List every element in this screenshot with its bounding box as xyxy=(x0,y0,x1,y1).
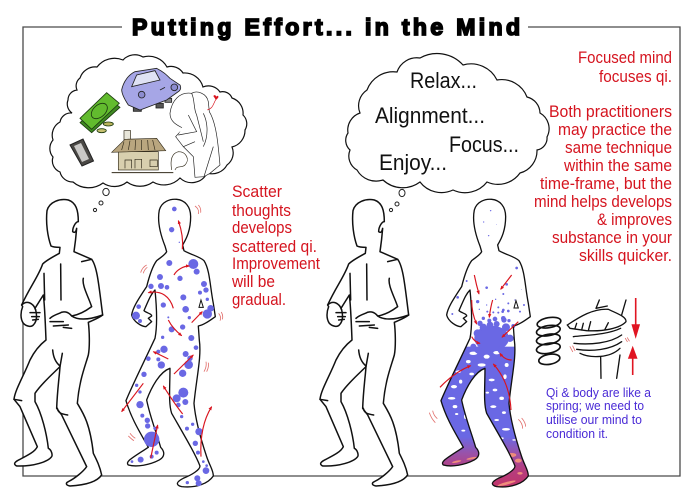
text: focused mind caption: mind helps develops xyxy=(534,193,672,211)
title: Putting Effort... in the Mind xyxy=(132,14,520,40)
text: scatter thoughts caption: develops xyxy=(232,219,292,237)
text: scatter thoughts caption: Improvement xyxy=(232,255,320,273)
thought cloud: material desires xyxy=(50,55,247,212)
chest mark xyxy=(199,300,203,307)
figure 1: plain body, scattered mind xyxy=(14,200,103,486)
text: focused mind caption: substance in your xyxy=(552,229,672,247)
motion marks xyxy=(128,205,223,441)
icon: house xyxy=(112,131,187,173)
text: scatter thoughts caption: thoughts xyxy=(232,202,291,220)
focused qi cluster at dantian xyxy=(451,210,525,356)
text: focused mind caption xyxy=(534,49,672,265)
text: focused mind caption: skills quicker. xyxy=(579,247,672,265)
text: focused mind caption: focuses qi. xyxy=(599,68,672,86)
text: spring caption: condition it. xyxy=(546,427,608,441)
motion marks xyxy=(570,338,629,352)
spring arrow down xyxy=(632,298,639,336)
motion marks xyxy=(429,411,526,429)
text: focused mind caption: may practice the xyxy=(558,121,672,139)
body outline xyxy=(441,199,530,487)
icon: coil spring xyxy=(536,316,562,366)
text: scatter thoughts caption: scattered qi. xyxy=(232,238,317,256)
text: focused mind caption: Focused mind xyxy=(578,49,672,67)
thought cloud: focus words xyxy=(346,54,549,212)
figure 2: scattered qi body xyxy=(122,199,223,487)
icon: money xyxy=(80,93,120,133)
text: focused mind caption: Both practitioners xyxy=(549,103,672,121)
spring and hand illustration xyxy=(536,300,629,378)
figure 3: plain body, focused mind xyxy=(320,200,409,486)
figure 4: focused qi body xyxy=(429,199,537,490)
text: spring caption: Qi & body are like a xyxy=(546,386,651,400)
word: Relax: Relax... xyxy=(410,68,477,93)
icon: hand pressing coiled arm xyxy=(567,300,626,378)
icon: phone xyxy=(70,139,94,166)
spring arrow up xyxy=(629,348,636,375)
word: Enjoy: Enjoy... xyxy=(379,150,447,175)
text: focused mind caption: within the same xyxy=(563,157,672,175)
text: scatter thoughts caption: Scatter xyxy=(232,183,282,201)
text: spring caption: utilise our mind to xyxy=(546,413,642,427)
inward qi arrows xyxy=(440,275,518,410)
word: Alignment: Alignment... xyxy=(375,103,485,128)
text: scatter thoughts caption xyxy=(231,183,320,309)
word: Focus: Focus... xyxy=(449,132,519,157)
qi dots scattered xyxy=(131,207,214,486)
icon: couple xyxy=(170,92,220,177)
warm patches on the feet xyxy=(452,453,523,487)
icon: car xyxy=(122,68,181,111)
thought bubbles right xyxy=(389,189,405,212)
thought bubbles left xyxy=(93,188,109,212)
text: focused mind caption: & improves xyxy=(597,211,672,229)
text: focused mind caption: time-frame, but the xyxy=(540,175,672,193)
text: spring caption: spring; we need to xyxy=(546,399,644,413)
qi flow arrows xyxy=(122,221,212,458)
text: spring caption xyxy=(546,386,651,441)
qi fill in legs and feet xyxy=(442,346,528,486)
white gaps between qi xyxy=(448,351,516,441)
text: scatter thoughts caption: will be xyxy=(231,273,275,291)
text: focused mind caption: same technique xyxy=(565,139,672,157)
text: scatter thoughts caption: gradual. xyxy=(232,291,286,309)
chest mark xyxy=(514,301,518,308)
